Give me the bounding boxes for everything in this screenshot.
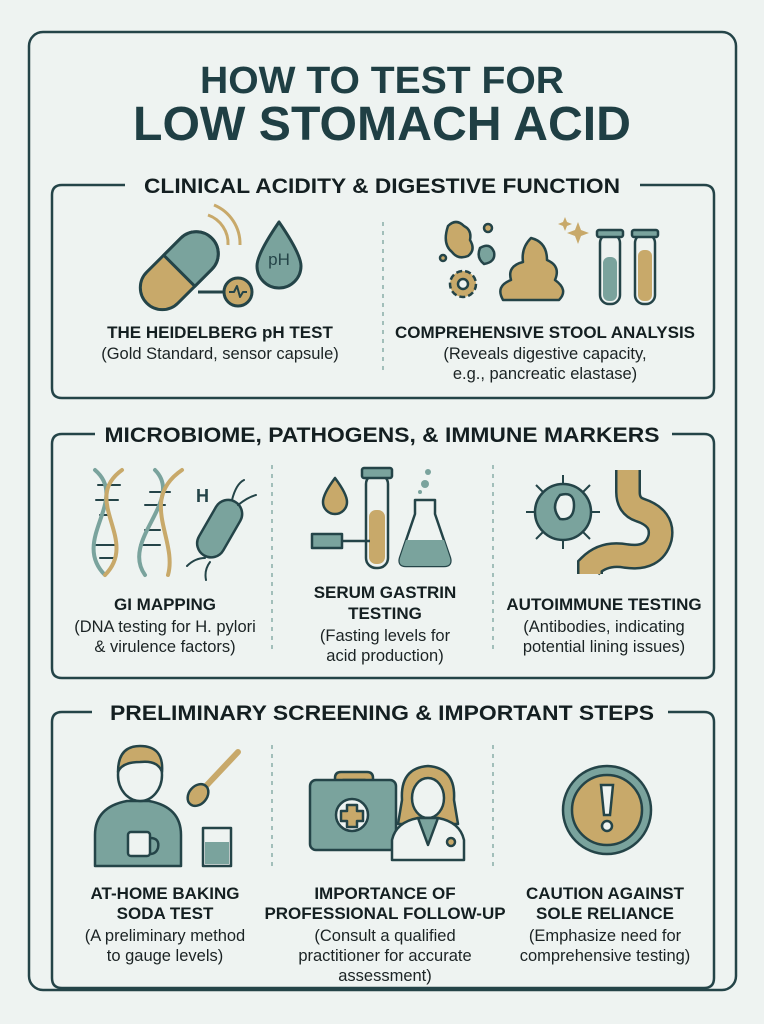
title: LOW STOMACH ACID bbox=[133, 98, 631, 151]
text: baking soda bbox=[85, 884, 245, 965]
text: professional follow-up: (Consult a qualified bbox=[314, 927, 456, 945]
text: stool analysis: e.g., pancreatic elastase) bbox=[453, 365, 637, 383]
text: serum gastrin: SERUM GASTRIN bbox=[314, 583, 456, 602]
icon: medical kit and doctor bbox=[310, 766, 464, 860]
text: GI mapping: GI MAPPING bbox=[114, 595, 216, 614]
text: baking soda: SODA TEST bbox=[117, 904, 214, 923]
text: GI mapping: (DNA testing for H. pylori bbox=[74, 618, 256, 636]
heading: clinical acidity: CLINICAL ACIDITY & DIGESTIVE FUNCTION bbox=[144, 175, 620, 198]
panel: microbiome bbox=[52, 424, 714, 678]
text: stool analysis: (Reveals digestive capacity, bbox=[443, 345, 647, 363]
icon: stool analysis bbox=[440, 217, 658, 304]
text: heidelberg: THE HEIDELBERG pH TEST bbox=[107, 323, 333, 342]
text: caution: comprehensive testing) bbox=[520, 947, 690, 965]
panel: preliminary screening bbox=[52, 702, 714, 988]
text: autoimmune: AUTOIMMUNE TESTING bbox=[506, 595, 702, 614]
panel: clinical acidity bbox=[52, 175, 714, 398]
icon: pH capsule bbox=[131, 205, 301, 319]
text: professional follow-up bbox=[264, 884, 506, 985]
text: caution: CAUTION AGAINST bbox=[526, 884, 685, 903]
text: professional follow-up: practitioner for accurate bbox=[298, 947, 472, 965]
icon: DNA and bacterium bbox=[94, 470, 256, 580]
icon: DNA and bacterium: H bbox=[196, 486, 209, 506]
heading: microbiome: MICROBIOME, PATHOGENS, & IMMUNE MARKERS bbox=[104, 424, 660, 447]
icon: person with spoon and glass bbox=[95, 746, 238, 866]
icon: serum tube and flask bbox=[312, 468, 450, 568]
text: serum gastrin: TESTING bbox=[348, 604, 422, 623]
text: professional follow-up: assessment) bbox=[338, 967, 432, 985]
text: serum gastrin bbox=[314, 583, 456, 665]
text: professional follow-up: IMPORTANCE OF bbox=[314, 884, 456, 903]
text: GI mapping: & virulence factors) bbox=[94, 638, 236, 656]
icon: caution bbox=[563, 766, 651, 854]
text: heidelberg bbox=[101, 323, 339, 363]
text: autoimmune: potential lining issues) bbox=[523, 638, 685, 656]
text: serum gastrin: (Fasting levels for bbox=[320, 627, 451, 645]
text: caution: SOLE RELIANCE bbox=[536, 904, 674, 923]
text: GI mapping bbox=[74, 595, 256, 656]
text: baking soda: (A preliminary method bbox=[85, 927, 245, 945]
text: stool analysis bbox=[395, 323, 695, 383]
text: professional follow-up: PROFESSIONAL FOLLOW-UP bbox=[264, 904, 506, 923]
text: caution: (Emphasize need for bbox=[529, 927, 682, 945]
text: baking soda: AT-HOME BAKING bbox=[91, 884, 239, 903]
text: heidelberg: (Gold Standard, sensor capsule) bbox=[101, 345, 339, 363]
icon: immune cell and stomach bbox=[526, 470, 661, 574]
title bbox=[133, 60, 631, 151]
text: caution bbox=[520, 884, 690, 965]
text: stool analysis: COMPREHENSIVE STOOL ANALYSIS bbox=[395, 323, 695, 342]
heading: preliminary: PRELIMINARY SCREENING & IMPORTANT STEPS bbox=[110, 702, 654, 725]
text: autoimmune: (Antibodies, indicating bbox=[523, 618, 685, 636]
icon: pH capsule: pH bbox=[268, 250, 290, 269]
text: baking soda: to gauge levels) bbox=[107, 947, 223, 965]
title: HOW TO TEST FOR bbox=[200, 60, 564, 102]
text: autoimmune bbox=[506, 595, 702, 656]
text: serum gastrin: acid production) bbox=[326, 647, 444, 665]
